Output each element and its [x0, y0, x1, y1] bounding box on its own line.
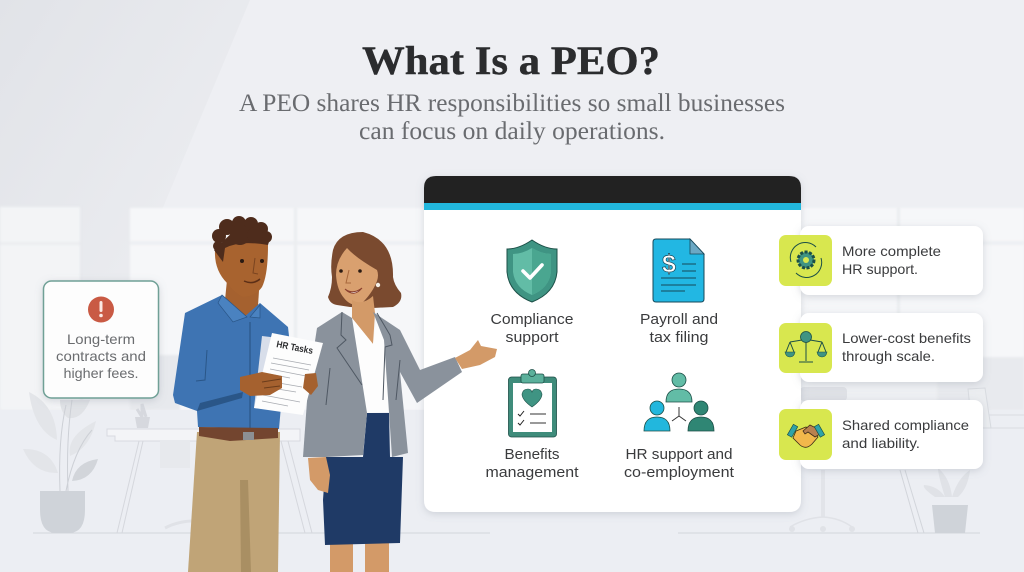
callout text: higher fees. — [64, 365, 138, 381]
icon: HR team network — [644, 373, 714, 431]
label: payroll and tax filing: Payroll and — [640, 311, 718, 328]
label: benefits management: management — [486, 464, 579, 481]
label: compliance support: support — [506, 329, 559, 346]
document: HR Tasks — [254, 333, 323, 415]
person: man holding HR tasks — [173, 216, 323, 572]
text: More complete — [842, 243, 941, 259]
text — [842, 417, 969, 451]
background plant right — [924, 468, 970, 533]
person: woman presenting — [303, 232, 497, 572]
label: benefits management: Benefits — [504, 446, 560, 463]
icon: scales — [779, 323, 832, 373]
benefit card: lower cost — [779, 313, 983, 382]
label: HR support and co-employment: HR support and — [626, 446, 732, 463]
callout text: Long-term — [67, 331, 135, 347]
panel header — [424, 176, 801, 210]
document: HR Tasks: HR Tasks — [275, 339, 314, 357]
hair — [212, 216, 272, 262]
hand: pointing — [455, 340, 497, 369]
text — [842, 330, 971, 364]
label: HR support and co-employment: co-employment — [624, 464, 735, 481]
panel: PEO services — [424, 176, 801, 512]
label: compliance support: Compliance — [490, 311, 574, 328]
title: What Is a PEO? — [362, 38, 660, 83]
subtitle — [239, 88, 785, 145]
icon: benefits clipboard — [508, 370, 556, 437]
callout: drawback — [44, 281, 158, 398]
text: through scale. — [842, 348, 935, 364]
icon: payroll document — [653, 239, 704, 302]
icon: handshake — [779, 409, 832, 460]
text — [842, 243, 941, 277]
text: HR support. — [842, 261, 918, 277]
label: payroll and tax filing: tax filing — [650, 329, 708, 346]
label: payroll and tax filing — [640, 311, 718, 346]
icon: payroll document: $ — [662, 250, 676, 278]
label: HR support and co-employment — [624, 446, 735, 481]
label: compliance support — [490, 311, 574, 346]
icon: alert — [88, 296, 114, 322]
text: Shared compliance — [842, 417, 969, 433]
text: and liability. — [842, 435, 920, 451]
benefit card: complete HR support — [779, 226, 983, 295]
icon: shield — [507, 240, 557, 302]
callout text — [56, 331, 146, 381]
callout text: contracts and — [56, 348, 146, 364]
subtitle: A PEO shares HR responsibilities so small businesses — [239, 88, 785, 117]
text: Lower-cost benefits — [842, 330, 971, 346]
benefit card: shared compliance — [779, 400, 983, 469]
hand: left — [308, 457, 330, 493]
subtitle: can focus on daily operations. — [359, 116, 665, 145]
background plant left — [23, 392, 150, 533]
icon: gear cycle — [779, 235, 832, 286]
label: benefits management — [486, 446, 579, 481]
